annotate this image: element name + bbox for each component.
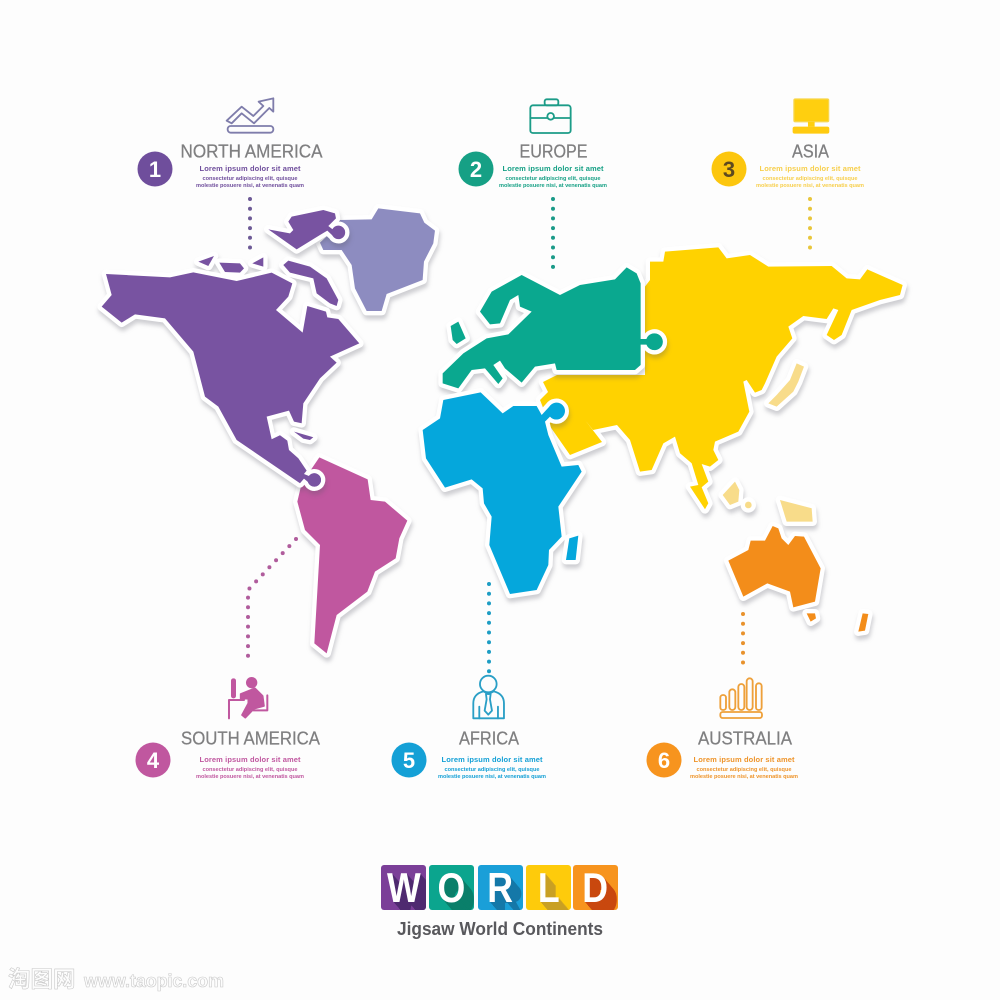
- text block: [690, 755, 798, 780]
- badge 5: 5: [403, 748, 415, 773]
- text block: consectetur adipiscing elit, quisque: [202, 767, 298, 773]
- badge 5: [392, 742, 426, 778]
- text block: Lorem ipsum dolor sit amet: [502, 164, 604, 173]
- block: Europe: [458, 142, 607, 189]
- block: North America: [138, 142, 322, 189]
- text block: [196, 164, 304, 189]
- text block: [756, 164, 864, 189]
- badge 6: 6: [658, 748, 670, 773]
- text block: consectetur adipiscing elit, quisque: [762, 176, 858, 182]
- heading: SOUTH AMERICA: [181, 728, 320, 748]
- text block: molestie posuere nisi, at venenatis quam: [499, 183, 607, 189]
- text block: molestie posuere nisi, at venenatis quam: [438, 774, 546, 780]
- watermark: 淘图网: [8, 962, 76, 994]
- dotted connector: Asia: [808, 199, 812, 257]
- icon: growth arrow: [227, 98, 273, 133]
- badge 1: 1: [149, 157, 161, 182]
- heading: NORTH AMERICA: [180, 142, 322, 162]
- WORLD title tiles: [381, 865, 618, 910]
- icon: businessman: [473, 676, 504, 718]
- block: Australia: [646, 728, 798, 780]
- dotted connector: South America: [248, 539, 296, 661]
- badge 2: 2: [470, 157, 482, 182]
- subtitle: Jigsaw World Continents: [397, 919, 603, 939]
- block: Asia: [712, 142, 864, 189]
- text block: consectetur adipiscing elit, quisque: [696, 767, 792, 773]
- badge 4: 4: [147, 748, 160, 773]
- block: South America: [136, 728, 320, 780]
- heading: ASIA: [792, 142, 829, 162]
- text block: Lorem ipsum dolor sit amet: [760, 164, 861, 173]
- text block: consectetur adipiscing elit, quisque: [506, 176, 600, 182]
- map: Greenland: [320, 208, 435, 311]
- badge 4: [136, 742, 170, 778]
- icon: bar chart: [720, 678, 762, 718]
- text block: Lorem ipsum dolor sit amet: [442, 755, 543, 764]
- text block: [499, 164, 607, 189]
- text block: consectetur adipiscing elit, quisque: [202, 176, 298, 182]
- map: Asia pale islands: [723, 363, 813, 522]
- dotted connector: Europe: [551, 199, 555, 274]
- badge 6: [646, 742, 682, 778]
- map: Europe: [443, 267, 663, 388]
- dotted connector: North America: [248, 199, 252, 250]
- block: Africa: [392, 728, 546, 780]
- badge 2: [458, 152, 494, 186]
- text block: [438, 755, 546, 780]
- text block: molestie posuere nisi, at venenatis quam: [196, 774, 304, 780]
- map: Africa: [423, 392, 582, 594]
- icon: person at desk: [229, 677, 267, 718]
- text block: Lorem ipsum dolor sit amet: [694, 755, 795, 764]
- text block: [196, 755, 304, 780]
- text block: molestie posuere nisi, at venenatis quam: [756, 183, 864, 189]
- map: South America: [297, 457, 407, 653]
- text block: consectetur adipiscing elit, quisque: [444, 767, 540, 773]
- icon: monitor: [793, 99, 829, 134]
- heading: AFRICA: [459, 728, 519, 748]
- watermark: www.taopic.com: [83, 971, 224, 991]
- text block: molestie posuere nisi, at venenatis quam: [196, 183, 304, 189]
- badge 3: 3: [723, 157, 735, 182]
- heading: AUSTRALIA: [698, 728, 792, 748]
- text block: Lorem ipsum dolor sit amet: [200, 164, 301, 173]
- badge 3: [712, 152, 746, 186]
- watermark: [8, 962, 224, 994]
- map: Australia: [728, 526, 868, 632]
- badge 1: [138, 152, 172, 186]
- dotted connector: Africa: [487, 584, 491, 673]
- text block: Lorem ipsum dolor sit amet: [200, 755, 301, 764]
- text block: molestie posuere nisi, at venenatis quam: [690, 774, 798, 780]
- map: North America: [102, 210, 359, 487]
- dotted connector: Australia: [741, 614, 745, 671]
- icon: briefcase: [530, 99, 571, 133]
- map: Asia: [540, 247, 903, 509]
- heading: EUROPE: [520, 142, 588, 162]
